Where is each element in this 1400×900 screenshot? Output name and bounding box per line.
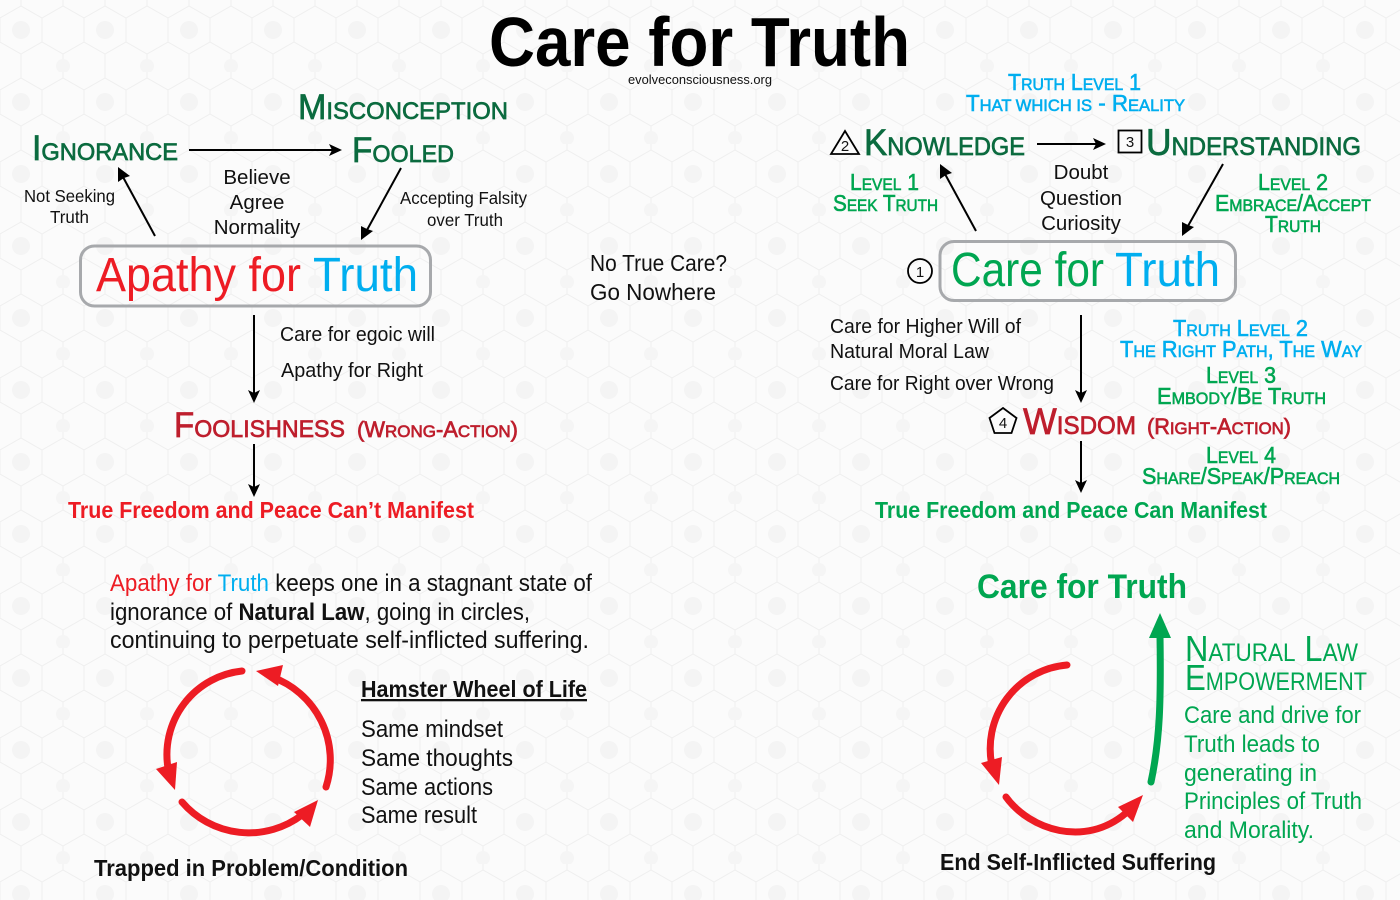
label: care for higher will: Care for Right over Wrong (830, 373, 1054, 395)
list: same mindset thoughts actions result: Same thoughts (361, 745, 513, 772)
label: believe agree normality: Believe (223, 166, 291, 189)
panel: natural law empowerment (940, 568, 1367, 875)
box: apathy for truth: Truth (313, 249, 418, 302)
label: care for higher will: Natural Moral Law (830, 341, 990, 363)
icon: circle 1: 1 (916, 264, 924, 281)
label: level 4 share (1142, 442, 1340, 489)
label: believe agree normality: Normality (214, 216, 301, 239)
label: not seeking truth: Truth (50, 207, 89, 227)
callout: no true care (590, 250, 727, 305)
label: level 1 seek truth (833, 169, 938, 216)
label: accepting falsity: over Truth (427, 210, 503, 230)
label: truth level 2: THE RIGHT PATH, THE WAY (1120, 336, 1362, 362)
label: care for higher will (830, 316, 1054, 395)
label: care for higher will: Care for Higher Will of (830, 316, 1021, 338)
heading: natural law empowerment: NATURAL LAW (1185, 628, 1358, 669)
list: same mindset thoughts actions result (361, 716, 513, 829)
label: doubt question curiosity: Curiosity (1041, 212, 1122, 235)
arrow: foolishness to outcome (248, 444, 260, 497)
node: wisdom (1023, 401, 1291, 442)
icon: circle 1 (908, 259, 932, 283)
label: care for egoic will: Apathy for Right (281, 360, 423, 382)
label: level 2 embrace accept truth: LEVEL 2 (1258, 169, 1328, 195)
panel: apathy flow (24, 88, 527, 523)
label: not seeking truth (24, 186, 115, 227)
chart: breaking the cycle arrows (981, 613, 1171, 832)
label: level 4 share: SHARE/SPEAK/PREACH (1142, 463, 1340, 489)
arrow: care to knowledge (940, 164, 976, 231)
node: foolishness (174, 406, 518, 445)
label: level 3 embody (1157, 362, 1326, 409)
arrow: knowledge to understanding (1037, 138, 1106, 150)
node: wisdom: WISDOM (1023, 401, 1136, 442)
heading: care for truth: Care for Truth (977, 568, 1187, 606)
caption: trapped: Trapped in Problem/Condition (94, 855, 408, 881)
heading: natural law empowerment (1185, 628, 1367, 698)
label: care for egoic will (280, 324, 435, 382)
label: level 1 seek truth: LEVEL 1 (850, 169, 919, 195)
arrow: apathy to foolishness (248, 315, 260, 403)
arrow: fooled to apathy (361, 168, 401, 240)
label: level 4 share: LEVEL 4 (1206, 442, 1276, 468)
text block: apathy explanation: ignorance of Natural Law, going in circles, (110, 599, 530, 626)
label: level 1 seek truth: SEEK TRUTH (833, 190, 938, 216)
text block: care and drive (1184, 702, 1362, 844)
list: same mindset thoughts actions result: Same actions (361, 774, 493, 801)
label: doubt question curiosity: Doubt (1054, 161, 1109, 184)
box: care for truth: Care for (951, 244, 1104, 297)
label: level 3 embody: EMBODY/BE TRUTH (1157, 383, 1326, 409)
list: same mindset thoughts actions result: Same result (361, 802, 477, 829)
arrow: understanding to care (1182, 164, 1223, 236)
label: level 2 embrace accept truth: EMBRACE/ACCEPT (1215, 190, 1371, 216)
panel: hamster wheel (94, 570, 592, 881)
box: apathy for truth: Apathy for (96, 249, 301, 302)
node: wisdom: (RIGHT-ACTION) (1147, 414, 1291, 439)
icon: triangle 2 (831, 131, 859, 155)
list: same mindset thoughts actions result: Same mindset (361, 716, 503, 743)
outcome: freedom can manifest: True Freedom and Peace Can Manifest (875, 497, 1267, 523)
website credit: evolveconsciousness.org (628, 72, 772, 87)
outcome: freedom can't manifest: True Freedom and Peace Can’t Manifest (68, 497, 474, 523)
node: foolishness: (WRONG-ACTION) (357, 417, 518, 442)
callout: no true care: No True Care? (590, 250, 727, 276)
icon: square 3 (1118, 130, 1142, 152)
node: knowledge: KNOWLEDGE (864, 122, 1025, 163)
arrow: wisdom to outcome (1075, 441, 1087, 493)
label: truth level 1: THAT WHICH IS - REALITY (966, 90, 1185, 116)
box: apathy for truth (80, 246, 430, 306)
callout: no true care: Go Nowhere (590, 279, 716, 305)
title: Care for Truth (489, 3, 910, 81)
node: foolishness: FOOLISHNESS (174, 406, 345, 445)
node: fooled: FOOLED (352, 131, 454, 170)
text block: care and drive: Care and drive for (1184, 702, 1361, 729)
label: level 3 embody: LEVEL 3 (1206, 362, 1276, 388)
node: ignorance: IGNORANCE (32, 129, 178, 168)
label: level 2 embrace accept truth: TRUTH (1265, 211, 1321, 237)
arrow: care to wisdom (1075, 315, 1087, 403)
label: accepting falsity (400, 188, 527, 230)
label: level 2 embrace accept truth (1215, 169, 1371, 237)
label: believe agree normality (214, 166, 301, 239)
text block: care and drive: and Morality. (1184, 817, 1314, 844)
heading: natural law empowerment: EMPOWERMENT (1185, 657, 1367, 698)
label: truth level 2 (1120, 315, 1362, 362)
label: believe agree normality: Agree (230, 191, 284, 214)
arrow: ignorance to fooled (189, 144, 342, 156)
label: truth level 1: TRUTH LEVEL 1 (1008, 69, 1141, 95)
chart: red cycle arrows (156, 665, 330, 833)
text block: apathy explanation (110, 570, 592, 654)
text block: care and drive: Principles of Truth (1184, 788, 1362, 815)
label: accepting falsity: Accepting Falsity (400, 188, 527, 208)
label: doubt question curiosity: Question (1040, 187, 1122, 210)
text block: apathy explanation: Apathy for Truth keeps one in a stagnant state of (110, 570, 592, 597)
icon: pentagon 4 (990, 408, 1016, 433)
node: understanding: UNDERSTANDING (1146, 122, 1361, 163)
icon: square 3: 3 (1126, 134, 1134, 151)
icon: pentagon 4: 4 (999, 415, 1007, 432)
panel: care flow (830, 69, 1371, 523)
label: truth level 2: TRUTH LEVEL 2 (1173, 315, 1308, 341)
label: not seeking truth: Not Seeking (24, 186, 115, 206)
caption: end self-inflicted suffering: End Self-Inflicted Suffering (940, 849, 1216, 875)
label: doubt question curiosity (1040, 161, 1122, 235)
text block: care and drive: generating in (1184, 760, 1317, 787)
arrow: apathy to ignorance (118, 167, 155, 236)
heading: hamster wheel of life: Hamster Wheel of Life (361, 676, 587, 702)
box: care for truth: Truth (1115, 244, 1220, 297)
label: care for egoic will: Care for egoic will (280, 324, 435, 346)
box: care for truth (940, 242, 1236, 300)
heading: misconception: MISCONCEPTION (298, 88, 508, 127)
icon: triangle 2: 2 (841, 138, 849, 155)
label: truth level 1 (966, 69, 1185, 116)
text block: apathy explanation: continuing to perpetuate self-inflicted suffering. (110, 627, 589, 654)
text block: care and drive: Truth leads to (1184, 731, 1320, 758)
